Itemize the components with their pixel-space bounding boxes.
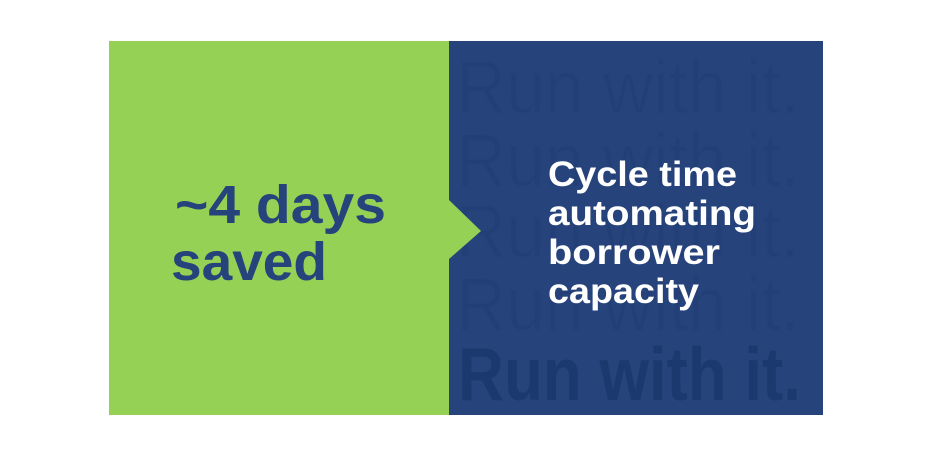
watermark: repeated Run with it.: [456, 45, 801, 416]
watermark: repeated Run with it.: Run with it.: [456, 189, 800, 273]
headline: ~4 days saved: ~4 days: [175, 175, 386, 235]
headline: ~4 days saved: [171, 175, 386, 292]
description: Cycle time automating borrower capacity: automating: [548, 194, 756, 233]
watermark: repeated Run with it.: Run with it.: [456, 118, 800, 202]
description: Cycle time automating borrower capacity: borrower: [548, 233, 720, 272]
panel: navy background: [449, 41, 823, 416]
watermark: repeated Run with it.: Run with it.: [458, 332, 801, 416]
description: Cycle time automating borrower capacity: capacity: [548, 272, 700, 311]
panel: green with arrow: [109, 41, 481, 415]
watermark: repeated Run with it.: Run with it.: [456, 45, 800, 129]
description: Cycle time automating borrower capacity: [548, 155, 756, 311]
watermark: repeated Run with it.: Run with it.: [456, 262, 800, 346]
headline: ~4 days saved: saved: [171, 232, 327, 292]
description: Cycle time automating borrower capacity: Cycle time: [548, 155, 737, 194]
